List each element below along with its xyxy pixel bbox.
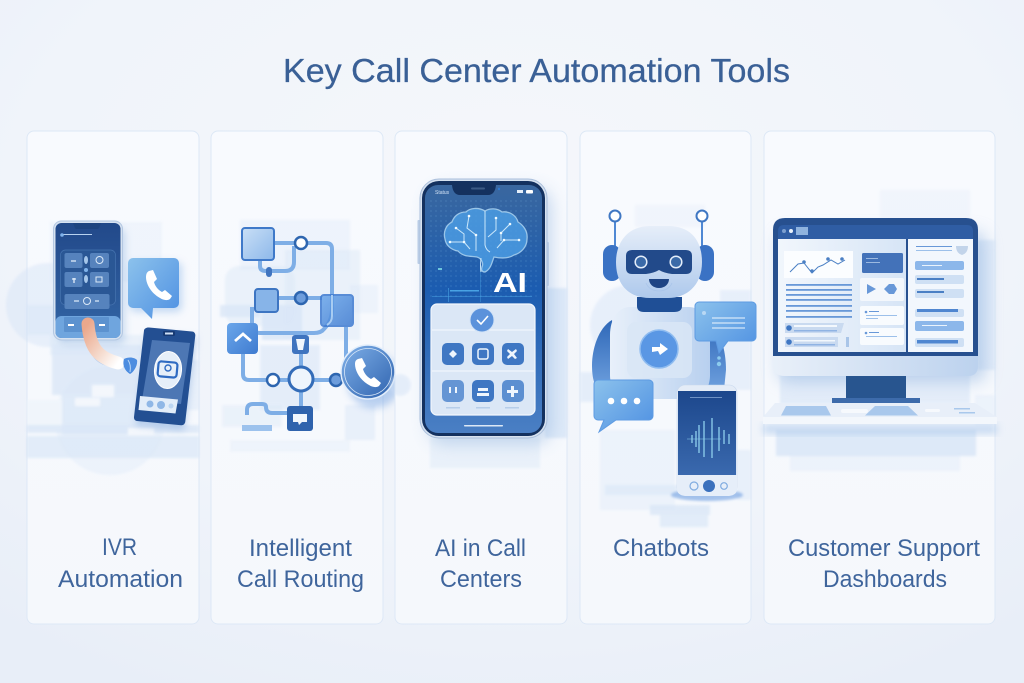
label: Customer Support Dashboards: Customer Support xyxy=(788,535,980,562)
faded background blocks: IVR xyxy=(6,222,199,475)
head xyxy=(616,226,702,298)
label: IVR Automation: IVR xyxy=(102,534,137,561)
panel: Chatbots xyxy=(580,131,756,624)
label: AI in Call Centers: AI in Call xyxy=(435,535,526,562)
icon: brain xyxy=(444,208,527,272)
mouth xyxy=(649,279,669,288)
icon: robot xyxy=(592,210,726,399)
screen header xyxy=(778,225,973,239)
sub-panel: summary cards centre xyxy=(860,253,904,345)
icon: phone call speech bubble xyxy=(128,258,182,319)
label: Customer Support Dashboards xyxy=(788,535,980,593)
label: IVR Automation: Automation xyxy=(58,566,183,593)
sub-panel: list rows left xyxy=(785,323,849,347)
node: chat square xyxy=(287,406,313,431)
node: hollow circle top xyxy=(295,237,307,249)
torso xyxy=(610,307,710,399)
icon: finger tapping with cable xyxy=(88,324,137,374)
chest panel xyxy=(627,322,692,378)
bezel xyxy=(773,218,978,356)
node: right circle xyxy=(330,374,342,386)
glow grid xyxy=(432,268,532,302)
text: AI: AI xyxy=(493,267,527,298)
panel: AI in Call Centers xyxy=(389,131,567,624)
panel: IVR Automation xyxy=(6,131,199,624)
label: Chatbots: Chatbots xyxy=(613,535,709,562)
home indicator xyxy=(464,425,503,426)
node: left circle xyxy=(267,374,279,386)
icon: IVR smartphone xyxy=(54,221,125,344)
node: overlapping square xyxy=(321,295,353,326)
sub-panel: text lines xyxy=(786,284,852,318)
node: shield badge xyxy=(292,335,309,354)
icon: smart speaker xyxy=(671,385,743,501)
label: AI in Call Centers: Centers xyxy=(440,566,522,593)
chin xyxy=(773,350,978,376)
arms xyxy=(592,320,620,390)
label: AI in Call Centers xyxy=(435,535,526,593)
panel: Customer Support Dashboards xyxy=(763,131,997,624)
node: filled circle xyxy=(295,292,307,304)
icon: desktop monitor xyxy=(773,218,986,404)
label: Customer Support Dashboards: Dashboards xyxy=(823,566,947,593)
icon: chat bubble with lines xyxy=(695,302,756,353)
node: middle square xyxy=(255,289,278,312)
faded background blocks: routing xyxy=(220,220,378,452)
status bar: Status xyxy=(435,190,450,196)
visor xyxy=(626,250,692,274)
icon: second mobile phone xyxy=(134,327,196,430)
title: Key Call Center Automation Tools xyxy=(283,53,790,90)
label: IVR Automation xyxy=(58,534,183,593)
label: Intelligent Call Routing xyxy=(237,535,364,593)
neck xyxy=(637,297,682,312)
node: top-left square xyxy=(242,228,274,260)
antennas xyxy=(610,210,708,248)
diagram: routing connector lines xyxy=(243,243,346,415)
ears xyxy=(603,245,621,281)
icon: keyboard desk xyxy=(763,403,997,434)
faded background blocks: AI xyxy=(389,288,567,468)
element: flat bar under routing xyxy=(242,425,272,431)
sub-panel: right column rows xyxy=(915,246,968,347)
icon: AI smartphone xyxy=(418,179,552,444)
node: small connector stub xyxy=(266,267,272,277)
stand xyxy=(846,376,906,399)
node: central hub xyxy=(289,367,313,391)
label: Intelligent Call Routing: Intelligent xyxy=(249,535,352,562)
icon: chat bubble with dots xyxy=(594,380,653,432)
faded background blocks: chatbot xyxy=(580,205,751,527)
card: app menu xyxy=(431,304,535,415)
faded background blocks: dashboard xyxy=(776,190,995,471)
label: Intelligent Call Routing: Call Routing xyxy=(237,566,364,593)
sub-panel: line chart xyxy=(784,251,853,278)
panel: Intelligent Call Routing xyxy=(211,131,401,624)
icon: round phone call button xyxy=(341,345,401,408)
node: chevron button xyxy=(227,323,258,354)
